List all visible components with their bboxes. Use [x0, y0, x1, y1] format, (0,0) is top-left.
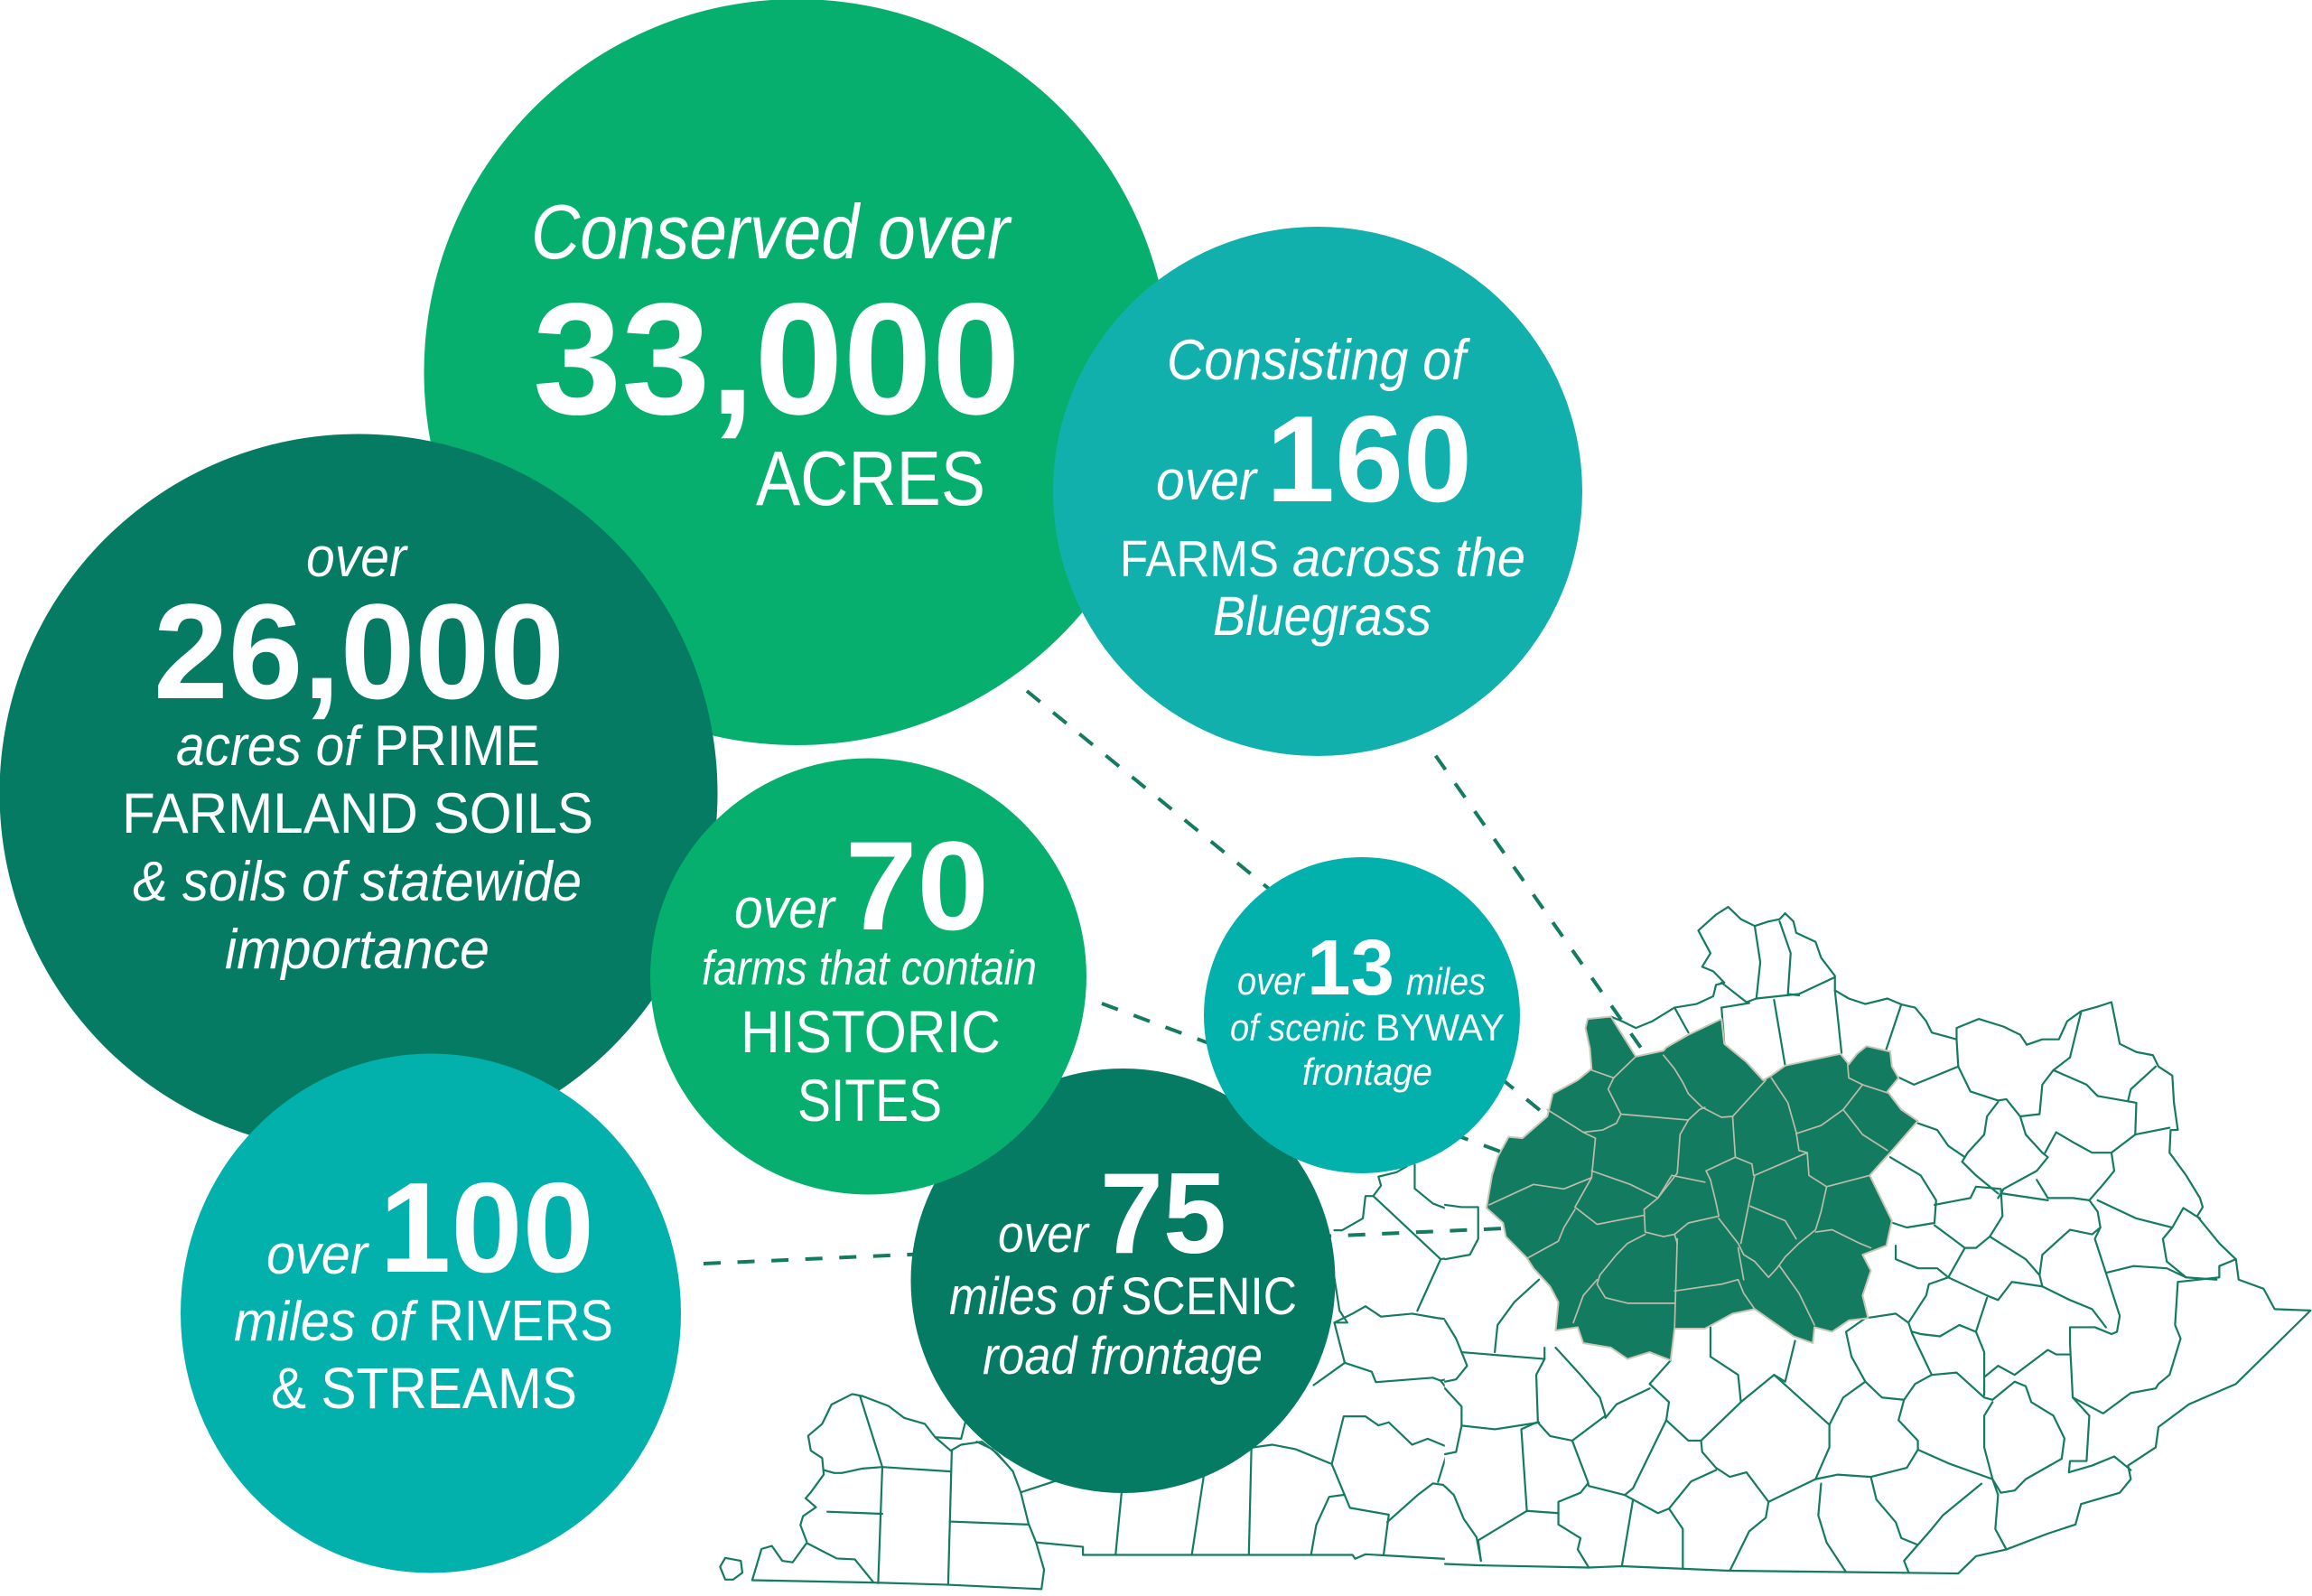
text: of scenic: of scenic: [1230, 1006, 1366, 1049]
dashed connector lines: [704, 691, 1643, 1264]
text: road frontage: road frontage: [983, 1327, 1263, 1386]
text: frontage: frontage: [1302, 1050, 1432, 1093]
text: BYWAY: BYWAY: [1375, 1006, 1505, 1049]
panel: historic sites: [650, 759, 1086, 1194]
text: over: over: [734, 878, 836, 940]
text: over: over: [266, 1224, 369, 1286]
text: Conserved over: Conserved over: [531, 190, 1012, 275]
text: across the: across the: [1292, 527, 1525, 588]
text: over: over: [998, 1205, 1090, 1264]
text: over: over: [306, 527, 408, 589]
text: HISTORIC: HISTORIC: [741, 998, 1001, 1065]
text: miles of: miles of: [234, 1291, 418, 1353]
number: 100: 100: [379, 1156, 594, 1300]
map: Kentucky counties: [720, 907, 2310, 1589]
panel: prime farmland: [0, 434, 717, 1153]
map: western Kentucky county outlines: [720, 1165, 1499, 1589]
text: & STREAMS: & STREAMS: [271, 1356, 577, 1421]
text: importance: importance: [225, 919, 489, 981]
text: RIVERS: RIVERS: [428, 1288, 613, 1353]
number: 26,000: 26,000: [154, 575, 564, 727]
text: FARMS: FARMS: [1120, 530, 1279, 588]
panel: conserved acres: [424, 0, 1170, 745]
text: over: over: [1156, 450, 1258, 512]
text: acres of: acres of: [176, 715, 363, 778]
text: Bluegrass: Bluegrass: [1213, 585, 1431, 647]
panel: rivers and streams: [181, 1053, 681, 1573]
number: 13: 13: [1307, 924, 1394, 1012]
text: SITES: SITES: [797, 1067, 942, 1134]
text: PRIME: PRIME: [374, 714, 540, 778]
number: 75: 75: [1100, 1149, 1226, 1277]
text: over: over: [1237, 959, 1306, 1003]
text: Consisting of: Consisting of: [1167, 329, 1470, 392]
map: highlighted Bluegrass counties: [1487, 1017, 1918, 1360]
panel: farms: [1053, 227, 1582, 756]
text: farms that contain: farms that contain: [702, 941, 1037, 995]
text: SCENIC: SCENIC: [1121, 1267, 1297, 1326]
panel: scenic road: [910, 1069, 1335, 1493]
number: 160: 160: [1266, 390, 1472, 527]
text: miles of: miles of: [949, 1267, 1114, 1326]
number: 70: 70: [845, 815, 989, 957]
text: ACRES: ACRES: [756, 436, 985, 522]
map: central and eastern Kentucky county outlines: [1445, 907, 2310, 1573]
panel: scenic byway: [1204, 857, 1520, 1173]
number: 33,000: 33,000: [533, 271, 1021, 448]
text: soils of statewide: & soils of statewide: [133, 851, 582, 913]
text: miles: miles: [1406, 960, 1486, 1003]
text: FARMLAND SOILS: FARMLAND SOILS: [122, 782, 593, 845]
